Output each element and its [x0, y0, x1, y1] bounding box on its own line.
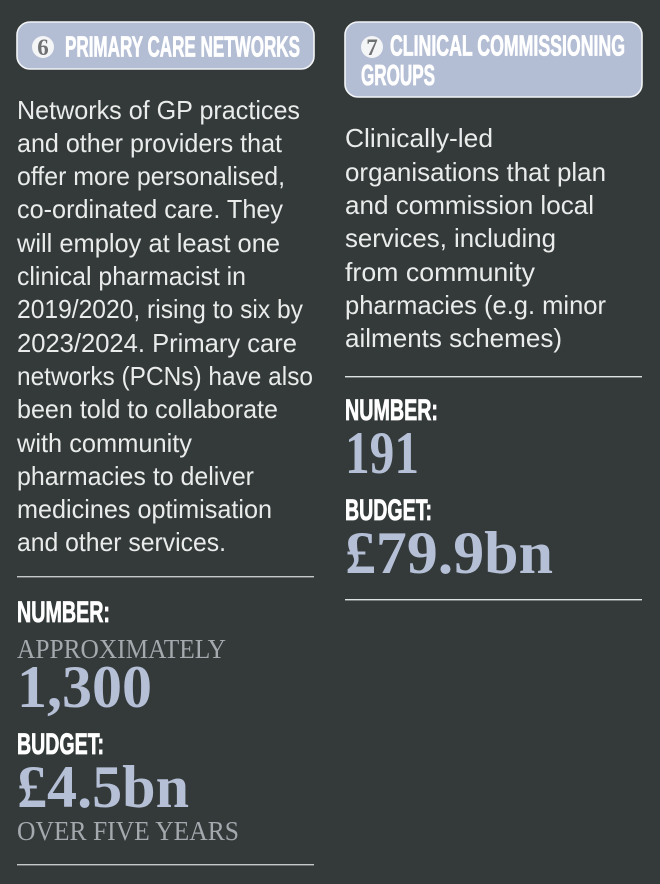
text block: description: co-ordinated care. They [17, 194, 283, 224]
panel: primary care networks [16, 22, 314, 865]
text block: description: 2023/2024. Primary care [17, 328, 297, 358]
text: over five years: OVER FIVE YEARS [17, 815, 239, 846]
icon: number 6 [32, 35, 54, 60]
label: number: NUMBER: [17, 596, 110, 629]
heading: primary care networks: PRIMARY CARE NETWORKS [65, 32, 300, 64]
text block: description: services, including [345, 223, 556, 253]
text block: description: and other services. [17, 527, 226, 557]
text block: description: from community [345, 257, 535, 287]
text block: description [16, 95, 313, 557]
text block: description: been told to collaborate [17, 394, 278, 424]
stat: 191: 191 [345, 420, 419, 486]
icon: number 7: 7 [366, 35, 378, 60]
text block: description: with community [16, 428, 192, 458]
label: number: NUMBER: [345, 394, 438, 427]
heading: clinical commissioning groups [345, 22, 642, 97]
text block: description: networks (PCNs) have also [17, 361, 313, 391]
stat: £4.5bn: £4.5bn [17, 754, 189, 820]
stat: £79.9bn: £79.9bn [345, 520, 553, 586]
text block: description: offer more personalised, [17, 161, 285, 191]
heading: primary care networks [17, 22, 314, 69]
text block: description: medicines optimisation [17, 494, 272, 524]
text block: description: will employ at least one [16, 228, 280, 258]
text block: description: pharmacies (e.g. minor [345, 290, 606, 320]
panel: clinical commissioning groups [345, 22, 642, 600]
text block: description: Clinically-led [345, 123, 493, 153]
text block: description: and commission local [345, 190, 594, 220]
text block: description: ailments schemes) [345, 323, 562, 353]
text: approximately: APPROXIMATELY [17, 633, 226, 664]
text block: description: and other providers that [17, 128, 283, 158]
icon: number 6: 6 [37, 35, 49, 60]
text block: description: pharmacies to deliver [17, 461, 254, 491]
text block: description [345, 123, 606, 353]
text block: description: organisations that plan [345, 157, 606, 187]
label: budget: BUDGET: [345, 494, 432, 527]
text block: description: Networks of GP practices [17, 95, 300, 125]
label: budget: BUDGET: [17, 728, 104, 761]
heading: clinical commissioning groups: GROUPS [361, 60, 435, 92]
icon: number 7 [361, 35, 383, 60]
stat: 1,300: 1,300 [17, 654, 152, 720]
text block: description: 2019/2020, rising to six by [17, 294, 303, 324]
text block: description: clinical pharmacist in [17, 261, 246, 291]
